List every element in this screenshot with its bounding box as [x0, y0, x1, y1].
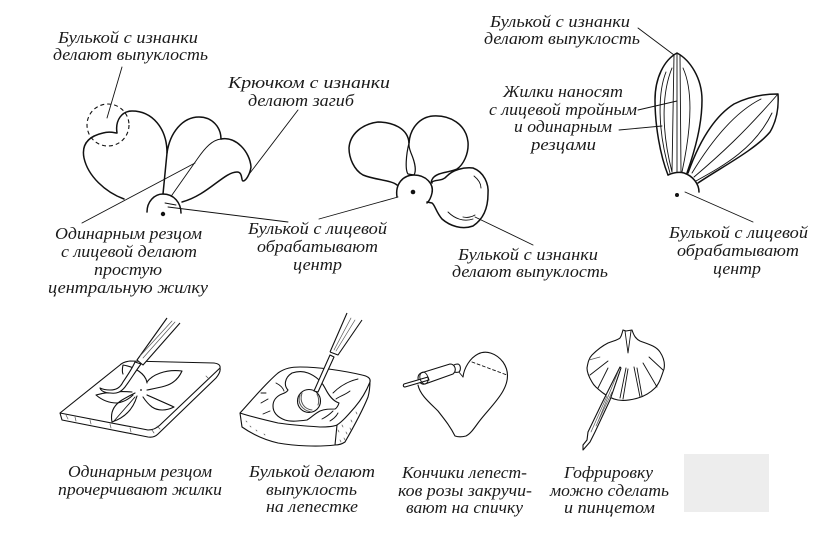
text: lower petal convexity — [452, 245, 608, 281]
text: central vein: Одинарным резцом — [55, 224, 202, 243]
grey placeholder block — [684, 454, 769, 512]
text: veins: и одинарным — [514, 117, 612, 136]
text: cutter caption: прочерчивают жилки — [58, 480, 222, 499]
pressure lines — [261, 379, 358, 421]
text: tip convexity: делают выпуклость — [484, 29, 640, 48]
text: central vein: простую — [94, 260, 162, 279]
convexity marks — [448, 176, 481, 220]
text: centre treatment: обрабатывают — [257, 237, 378, 256]
text: lower petal convexity: Булькой с изнанки — [457, 245, 598, 264]
cutter shaft — [100, 362, 141, 393]
text: hook bend: делают загиб — [248, 91, 354, 110]
text: hook bend — [227, 73, 390, 110]
heart petal — [273, 372, 339, 421]
icon: left petal — [349, 122, 409, 185]
icon: bulb centre — [397, 175, 432, 203]
icon: upright petal — [655, 53, 702, 175]
text: rose caption: ков розы закручи- — [398, 481, 532, 500]
tool collar hatching — [140, 321, 175, 358]
tweezers — [583, 367, 621, 450]
rolled edge — [418, 364, 455, 384]
text: right centre treatment: центр — [713, 259, 761, 278]
tool handle — [330, 313, 362, 355]
curled tip — [452, 364, 460, 372]
right petal — [143, 395, 174, 410]
text: veins: Жилки наносят — [502, 82, 623, 101]
text: centre treatment — [247, 219, 388, 274]
text: right centre treatment — [668, 223, 809, 278]
text: tweezers caption: и пинцетом — [564, 498, 655, 517]
dashed circle marker — [87, 104, 129, 146]
icon: lower petal — [427, 168, 488, 228]
text: veins: с лицевой тройным — [489, 100, 637, 119]
leader lines — [319, 197, 533, 245]
illustration: tweezers and fluted petal — [583, 330, 664, 450]
text: tip convexity: Булькой с изнанки — [489, 12, 630, 31]
illustration: rose petal on match — [403, 352, 508, 437]
illustration: cutter on pad — [60, 318, 220, 437]
petal vein — [172, 139, 221, 195]
text: convexity from reverse — [53, 28, 208, 64]
pad side texture — [66, 376, 209, 433]
tool shaft — [314, 355, 334, 392]
fluted petal — [587, 330, 664, 400]
upright petal veins — [660, 53, 690, 173]
text: central vein: центральную жилку — [48, 278, 208, 297]
bottom petal — [111, 393, 137, 422]
foam pad — [240, 367, 370, 446]
leader lines — [82, 67, 298, 223]
centre dot — [675, 193, 679, 197]
icon: curled petal — [182, 139, 251, 202]
text: right centre treatment: обрабатывают — [677, 241, 799, 260]
text: centre treatment: Булькой с лицевой — [247, 219, 388, 238]
text: centre treatment: центр — [293, 255, 342, 274]
petal left edge — [458, 371, 463, 377]
text: ball caption: выпуклость — [266, 480, 357, 499]
foam pad — [60, 361, 220, 437]
text: right centre treatment: Булькой с лицевой — [668, 223, 809, 242]
leaning petal veins — [692, 94, 778, 181]
flower diagram: round petals — [319, 116, 533, 245]
upper-left petal — [122, 365, 147, 383]
petal flower — [96, 365, 182, 422]
text: lower petal convexity: делают выпуклость — [452, 262, 608, 281]
icon: bulb centre — [147, 194, 181, 213]
text: ball caption: на лепестке — [266, 497, 358, 516]
text: hook bend: Крючком с изнанки — [227, 73, 390, 92]
flower diagram: heart petals — [82, 67, 298, 223]
text: tweezers caption: можно сделать — [549, 481, 669, 500]
centre dot — [161, 212, 165, 216]
text: ball caption — [248, 462, 375, 516]
flower centre — [140, 389, 142, 391]
text: rose caption: Кончики лепест- — [401, 463, 527, 482]
petal veins — [114, 395, 172, 421]
icon: middle petal — [167, 117, 221, 153]
text: convexity from reverse: Булькой с изнанки — [57, 28, 198, 47]
icon: leaning petal — [688, 94, 778, 183]
icon: heart petal — [83, 111, 167, 199]
text: cutter caption — [58, 462, 222, 499]
pad side texture — [246, 412, 357, 442]
ball — [298, 390, 320, 412]
tweezers hatching — [591, 372, 618, 432]
faint flute — [589, 357, 600, 360]
text: convexity from reverse: делают выпуклость — [53, 45, 208, 64]
text: veins: резцами — [530, 135, 596, 154]
flower diagram: long petals — [619, 28, 778, 222]
text: tweezers caption — [549, 463, 669, 517]
roll end — [419, 371, 429, 385]
text: tweezers caption: Гофрировку — [563, 463, 653, 482]
inner fold — [406, 143, 415, 175]
text: central vein: с лицевой делают — [61, 242, 197, 261]
ball shading — [299, 393, 319, 412]
dashed fold — [472, 362, 507, 375]
flutes — [590, 331, 663, 399]
top-right petal — [147, 371, 182, 390]
tool hatching — [334, 318, 355, 351]
cutter tool — [137, 318, 180, 365]
text: rose caption — [398, 463, 532, 517]
icon: upper petal — [409, 116, 468, 183]
text: central vein — [48, 224, 208, 297]
matchstick — [403, 377, 429, 387]
leader lines — [619, 28, 753, 222]
text: rose caption: вают на спичку — [406, 498, 523, 517]
left petal — [96, 392, 133, 403]
illustration: ball tool on pad — [240, 313, 370, 446]
text: tip convexity — [484, 12, 640, 48]
text: ball caption: Булькой делают — [248, 462, 375, 481]
heart petal — [418, 352, 508, 437]
text: veins — [489, 82, 637, 154]
text: cutter caption: Одинарным резцом — [68, 462, 212, 481]
icon: bulb centre — [668, 172, 699, 192]
centre dot — [411, 190, 415, 194]
